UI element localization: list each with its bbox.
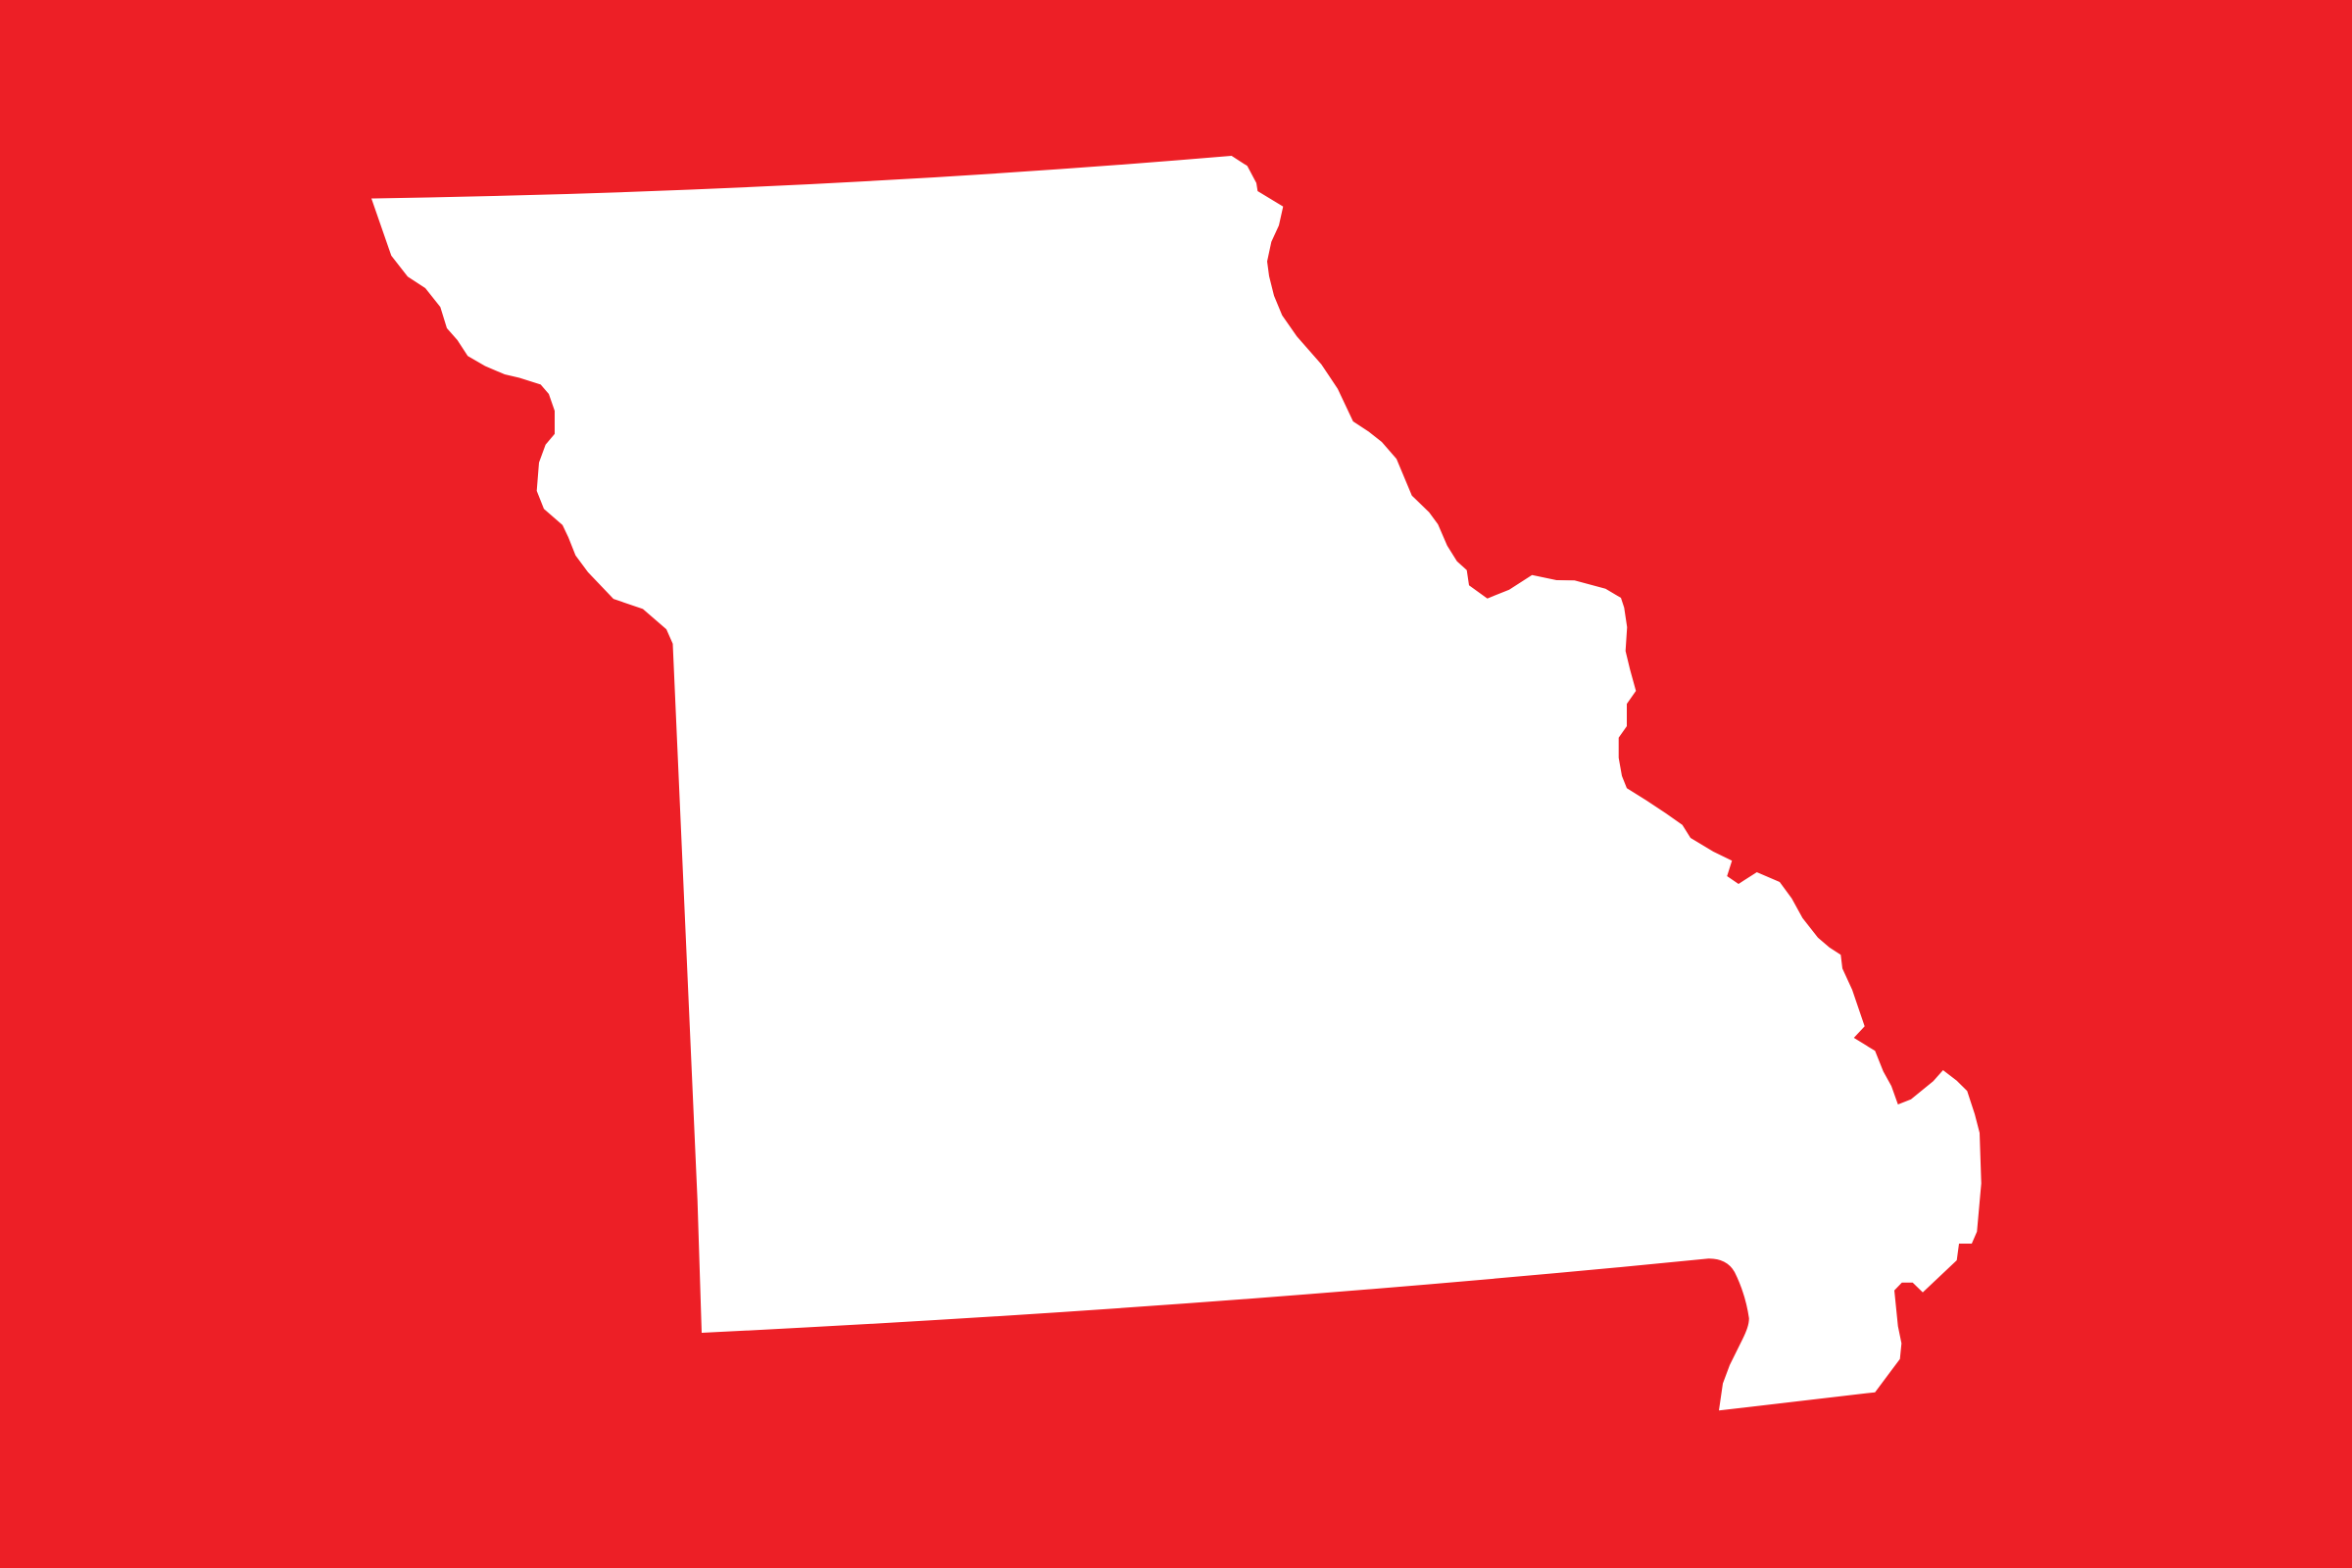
icon: Missouri state shape — [371, 156, 1982, 1410]
